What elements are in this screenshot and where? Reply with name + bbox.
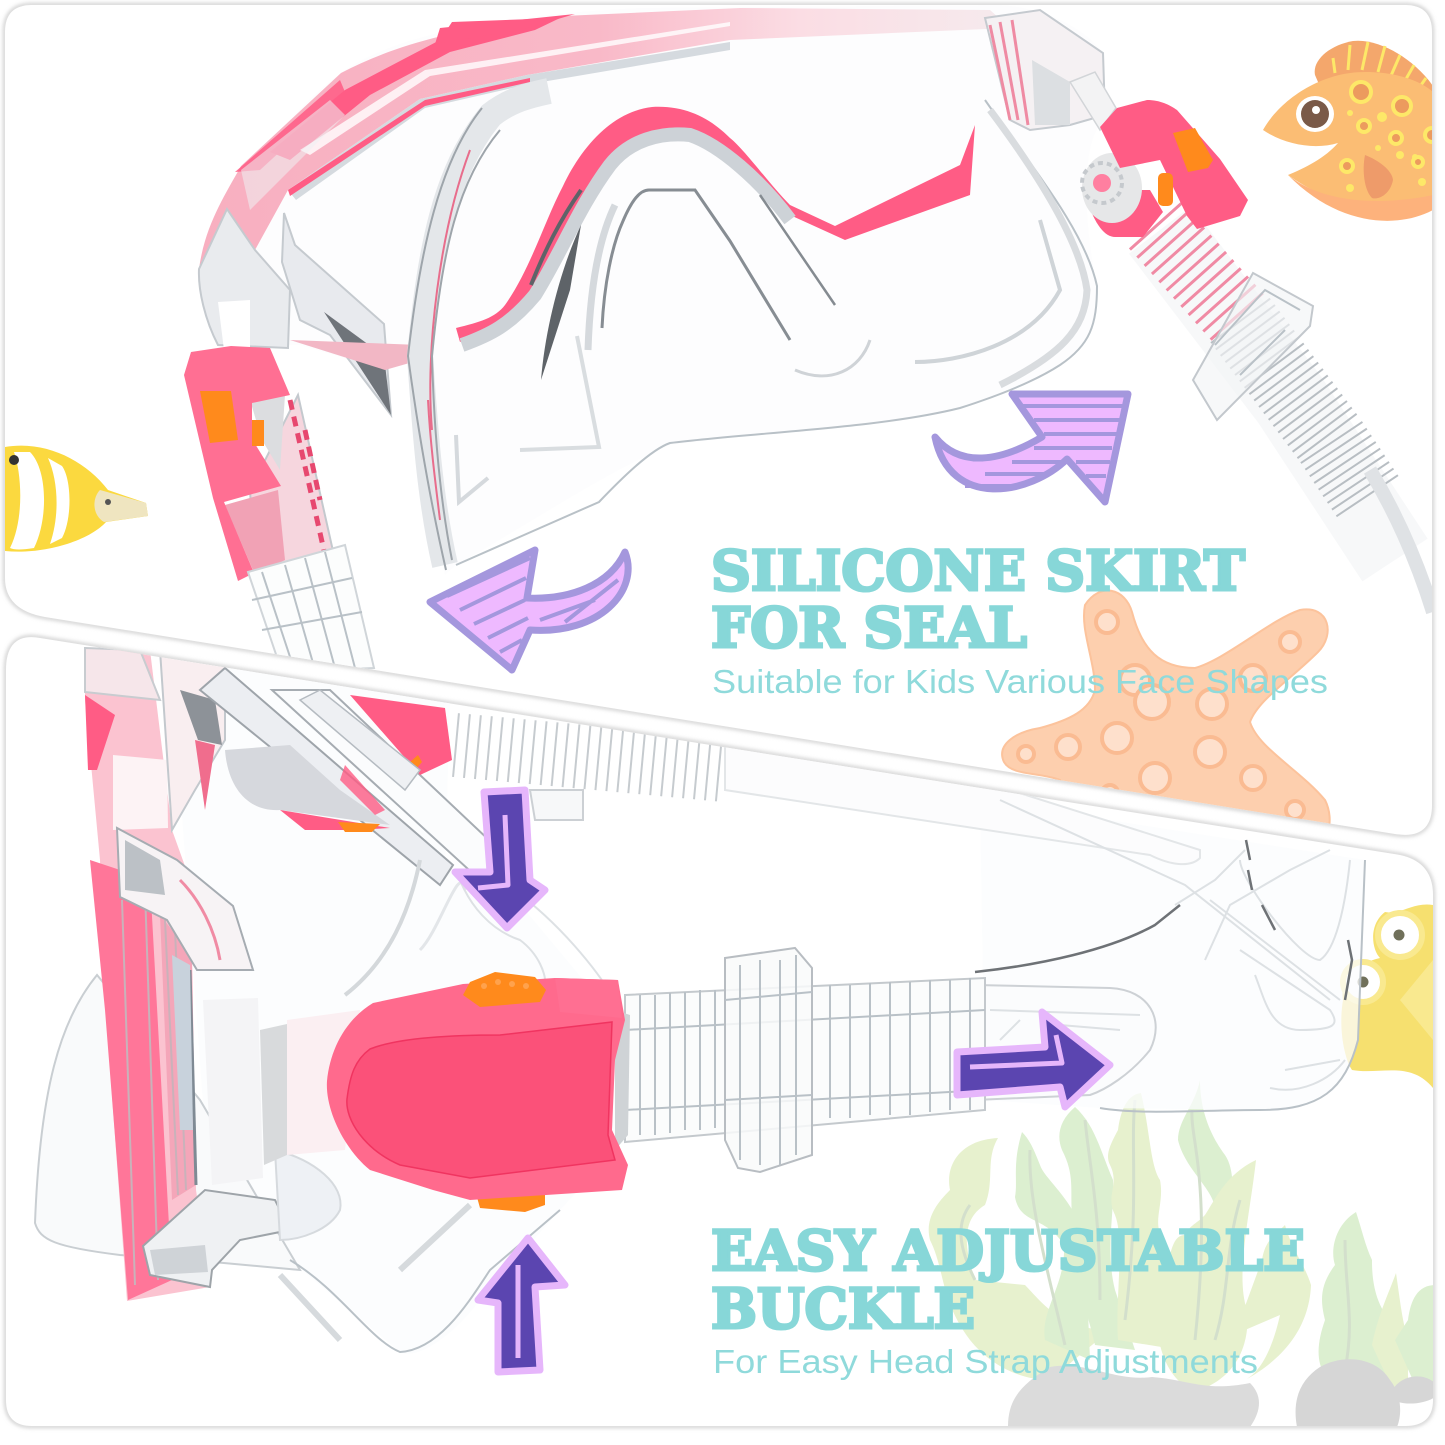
panel: easy adjustable buckle xyxy=(5,630,1435,1430)
heading line two: FOR SEAL xyxy=(711,595,1027,660)
icon: orange fish xyxy=(1263,41,1439,221)
goggles: mask frame top view xyxy=(199,5,1116,575)
pink nose seal xyxy=(456,107,975,342)
top frame pink band xyxy=(199,8,1010,269)
far body tint xyxy=(1124,959,1360,1110)
skirt outline xyxy=(456,100,1097,565)
right frame block xyxy=(985,10,1105,130)
skirt fill xyxy=(170,650,1000,1354)
vertical band xyxy=(420,91,549,565)
nose bridge bands xyxy=(462,134,790,345)
illustration: seaweed and rocks xyxy=(929,1080,1435,1427)
arrow: right xyxy=(957,1012,1110,1107)
diagonal bands xyxy=(200,668,453,885)
buckle: large pink xyxy=(327,972,630,1212)
arrow: curved bottom left xyxy=(430,550,628,670)
tab and strap end xyxy=(975,985,1156,1100)
left inner frame xyxy=(282,213,391,415)
icon: starfish xyxy=(1002,591,1330,850)
arrow: curved top right xyxy=(935,394,1128,502)
left skirt flap xyxy=(35,975,300,1270)
buckle: top right xyxy=(1082,100,1248,237)
subtitle: head strap adjustments: For Easy Head Strap Adjustments xyxy=(713,1343,1258,1380)
panel backdrop: top panel xyxy=(5,5,1432,835)
panel: silicone skirt xyxy=(5,5,1439,850)
skirt lines xyxy=(534,905,602,980)
arrow: down xyxy=(455,790,545,928)
goggles: mask side view xyxy=(35,648,1365,1354)
heading: easy adjustable buckle: EASY ADJUSTABLE xyxy=(711,1218,1305,1283)
icon: butterfly fish xyxy=(5,446,148,552)
panel backdrop: bottom panel xyxy=(6,637,1433,1426)
far strap xyxy=(455,745,725,770)
icon: yellow fish xyxy=(1341,905,1433,1088)
heading line two: BUCKLE xyxy=(711,1276,975,1341)
strap: top right xyxy=(1155,225,1433,612)
frame claw xyxy=(117,828,253,970)
strap: main with ribs xyxy=(625,948,985,1172)
lower frame piece xyxy=(143,1190,290,1287)
arrow: up xyxy=(478,1238,565,1372)
buckle: left side xyxy=(184,346,335,581)
frame pale body xyxy=(85,650,210,1301)
white clip block xyxy=(203,998,263,1185)
frame side block xyxy=(199,209,290,348)
heading: silicone skirt for seal: SILICONE SKIRT xyxy=(711,538,1245,603)
upper frame piece xyxy=(160,650,225,830)
strap: left side xyxy=(248,545,374,672)
subtitle: suitable for kids: Suitable for Kids Various Face Shapes xyxy=(712,663,1328,700)
